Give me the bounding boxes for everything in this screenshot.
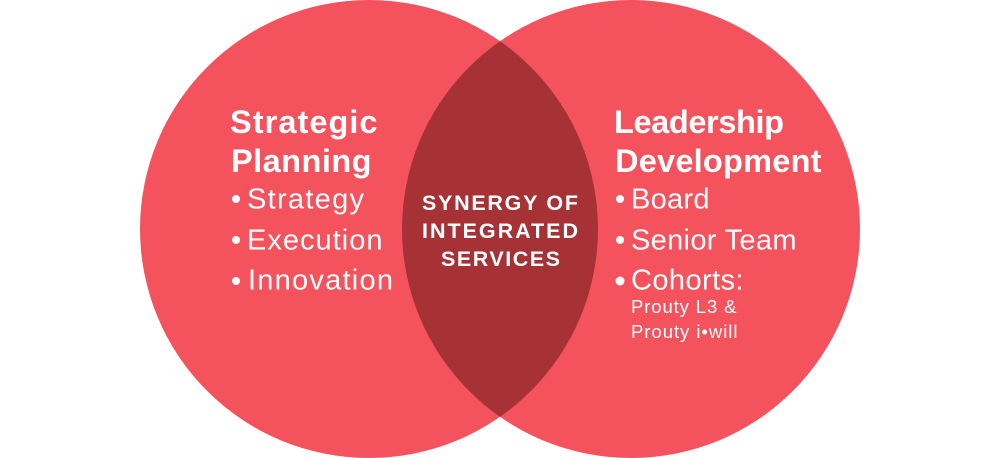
center label: synergy of integrated services: INTEGRATED	[422, 219, 578, 243]
right panel text: leadership development	[614, 104, 822, 342]
list: strategy, execution, innovation: Execution	[247, 224, 382, 256]
list: board, senior team, cohorts: Board	[631, 184, 710, 216]
heading: strategic planning: Planning	[231, 143, 372, 179]
list: board, senior team, cohorts: Prouty i•will	[631, 321, 738, 342]
venn diagram	[140, 0, 860, 458]
list: strategy, execution, innovation: Innovation	[248, 264, 393, 296]
circle: strategic planning	[140, 0, 598, 458]
overlap: synergy lens	[402, 41, 598, 417]
center label: synergy of integrated services: SYNERGY OF	[422, 191, 578, 215]
center label: synergy of integrated services	[422, 191, 578, 271]
list: strategy, execution, innovation: Strategy	[247, 184, 364, 216]
circle: leadership development	[402, 0, 860, 458]
heading: leadership development	[614, 104, 822, 179]
heading: leadership development: Development	[615, 143, 822, 179]
heading: leadership development: Leadership	[614, 104, 784, 140]
heading: strategic planning: Strategic	[230, 104, 378, 140]
list: strategy, execution, innovation	[232, 184, 393, 296]
heading: strategic planning	[230, 104, 378, 179]
list: board, senior team, cohorts: Cohorts:	[631, 264, 744, 296]
list: board, senior team, cohorts	[616, 184, 796, 342]
list: board, senior team, cohorts: Senior Team	[631, 224, 796, 256]
left panel text: strategic planning	[230, 104, 393, 296]
list: board, senior team, cohorts: Prouty L3 &	[631, 296, 737, 317]
center label: synergy of integrated services: SERVICES	[441, 247, 560, 271]
